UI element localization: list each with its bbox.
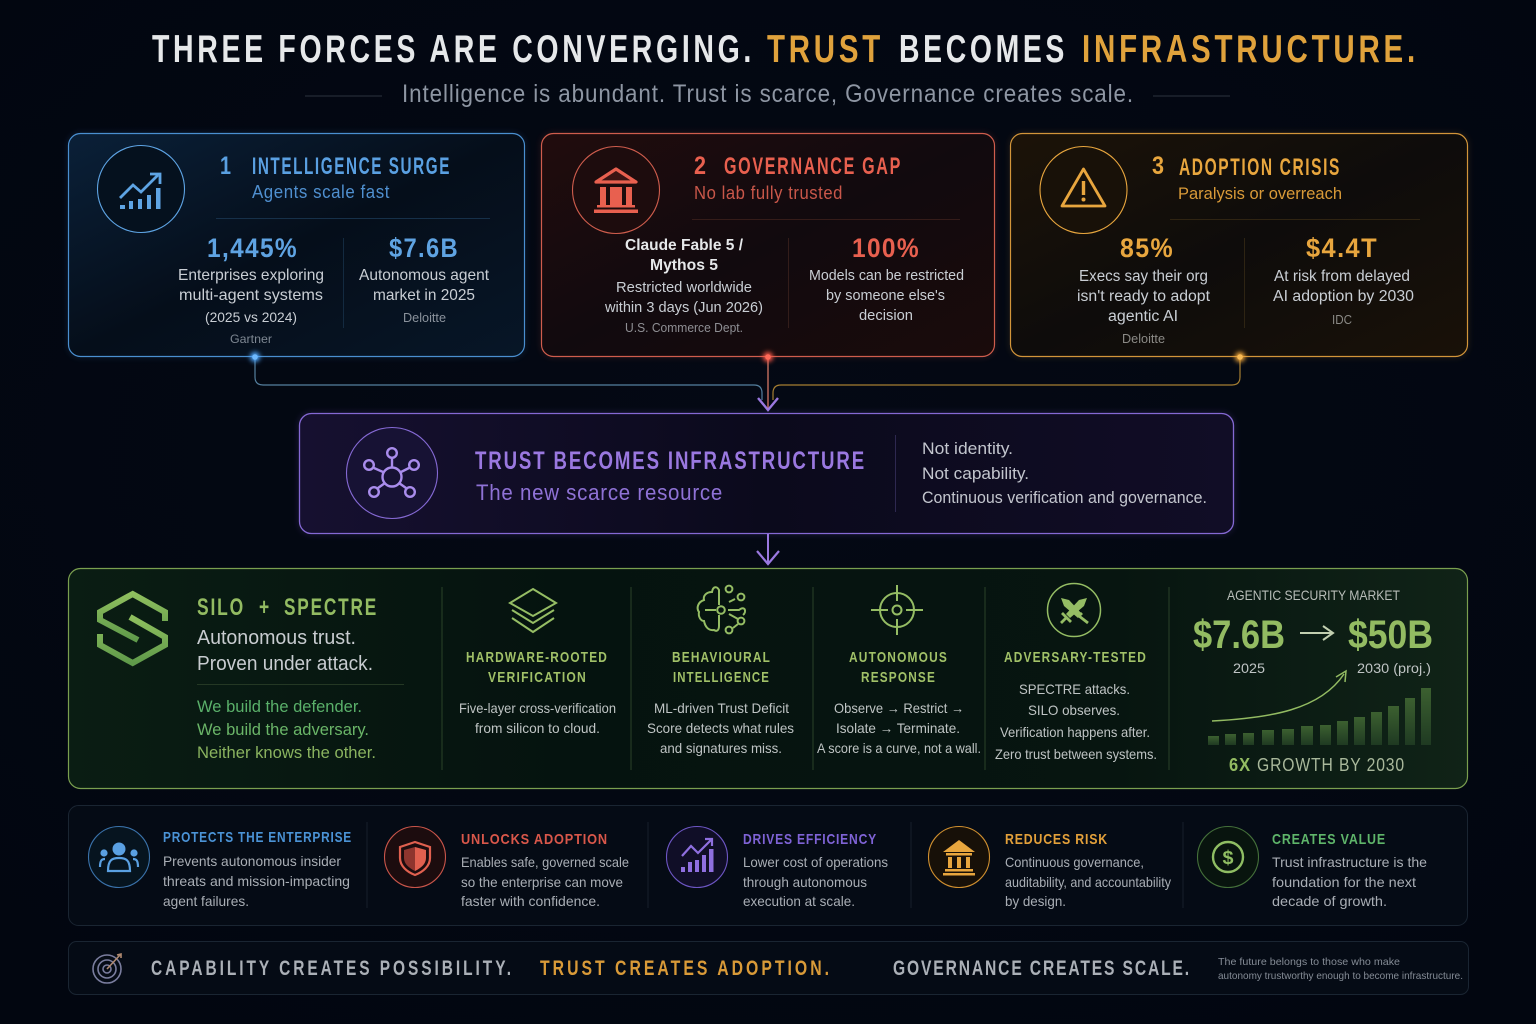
panel: intelligence surge xyxy=(68,134,524,356)
outcome: unlocks adoption: Enables safe, governed scale xyxy=(461,854,629,870)
statement xyxy=(922,440,1207,507)
outcome: protects the enterprise: agent failures. xyxy=(163,893,249,909)
outcome: drives efficiency xyxy=(666,826,888,909)
stat: 85% xyxy=(1077,233,1211,346)
outcome: unlocks adoption: UNLOCKS ADOPTION xyxy=(461,831,608,848)
stat: 100% xyxy=(809,233,964,324)
arrow into silo panel xyxy=(757,534,779,564)
stat: 85%: Execs say their org xyxy=(1079,268,1208,285)
chart: agentic security market: 2025 xyxy=(1233,660,1265,676)
panel: adoption crisis xyxy=(1010,134,1468,356)
outcome: protects the enterprise: Prevents autonomous insider xyxy=(163,853,341,869)
stat: 1,445%: Enterprises exploring xyxy=(178,267,324,284)
subtitle: Intelligence is abundant. Trust is scarce, Governance creates scale. xyxy=(402,80,1134,108)
outcome: reduces risk xyxy=(928,826,1171,909)
feature: adversary-tested: ADVERSARY-TESTED xyxy=(1004,649,1147,666)
subheading: Paralysis or overreach xyxy=(1178,184,1342,203)
panel: outcomes xyxy=(68,806,1468,926)
outcome: drives efficiency: execution at scale. xyxy=(743,893,855,909)
stat: Claude Fable 5 / Mythos 5: Mythos 5 xyxy=(650,257,718,274)
stat: 100%: decision xyxy=(859,307,913,324)
icon: network xyxy=(346,428,438,518)
stat: Claude Fable 5 / Mythos 5: U.S. Commerce Dept. xyxy=(625,321,743,335)
subheading: The new scarce resource xyxy=(476,480,723,505)
stat: 100%: Models can be restricted xyxy=(809,267,964,284)
icon: institution xyxy=(928,826,990,888)
title: TRUST xyxy=(767,28,884,71)
closing: governance: GOVERNANCE CREATES SCALE. xyxy=(893,957,1191,980)
icon: rising chart xyxy=(98,146,184,232)
feature: autonomous response: RESPONSE xyxy=(861,669,936,686)
icon: people xyxy=(88,826,150,888)
panel: silo + spectre xyxy=(68,568,1468,788)
outcome: reduces risk: REDUCES RISK xyxy=(1005,831,1108,848)
outcome: creates value: CREATES VALUE xyxy=(1272,831,1386,848)
brand statement: Neither knows the other. xyxy=(197,743,376,762)
feature: adversary-tested: SILO observes. xyxy=(1028,702,1120,718)
statement: Not identity. xyxy=(922,440,1013,458)
feature: behavioural intelligence: and signatures miss. xyxy=(660,740,782,756)
heading xyxy=(1152,152,1341,181)
stat: 1,445% xyxy=(178,233,324,346)
outcome: reduces risk: by design. xyxy=(1005,893,1066,909)
heading xyxy=(694,152,902,180)
brand statement: We build the adversary. xyxy=(197,720,369,739)
outcome: drives efficiency: DRIVES EFFICIENCY xyxy=(743,831,877,848)
stat: $4.4T: AI adoption by 2030 xyxy=(1273,288,1414,305)
feature: adversary-tested: Verification happens after. xyxy=(1000,724,1150,740)
bars xyxy=(1208,688,1431,745)
feature: autonomous response: Isolate → Terminate. xyxy=(836,720,960,736)
brand tagline: Proven under attack. xyxy=(197,653,373,675)
outcome: unlocks adoption xyxy=(384,826,629,909)
feature: behavioural intelligence: ML-driven Trust Deficit xyxy=(654,700,789,716)
closing note: autonomy trustworthy enough to become infrastructure. xyxy=(1218,970,1463,982)
subheading: Agents scale fast xyxy=(252,182,390,202)
statement: Not capability. xyxy=(922,465,1029,483)
market values: $50B xyxy=(1348,613,1433,657)
outcome: protects the enterprise: threats and mission-impacting xyxy=(163,873,350,889)
statement: Continuous verification and governance. xyxy=(922,489,1207,507)
growth label: GROWTH BY 2030 xyxy=(1257,755,1405,775)
arrow into trust panel xyxy=(758,398,778,410)
heading: 1 xyxy=(220,152,231,180)
outcome: creates value: Trust infrastructure is the xyxy=(1272,854,1427,870)
stat: 85%: Deloitte xyxy=(1122,332,1165,346)
heading: INTELLIGENCE SURGE xyxy=(252,153,451,180)
title: THREE FORCES ARE CONVERGING. xyxy=(152,28,755,71)
outcome: unlocks adoption: faster with confidence. xyxy=(461,893,600,909)
outcome: reduces risk: Continuous governance, xyxy=(1005,854,1144,870)
brand tagline: Autonomous trust. xyxy=(197,627,356,649)
brand heading: SPECTRE xyxy=(284,594,378,621)
stat: 100%: by someone else's xyxy=(826,287,945,304)
heading: 3 xyxy=(1152,152,1164,180)
stat: 100%: 100% xyxy=(852,233,920,263)
market values: $7.6B xyxy=(1193,613,1285,657)
stat: $7.6B: $7.6B xyxy=(389,233,459,263)
outcome: unlocks adoption: so the enterprise can move xyxy=(461,874,623,890)
outcome: reduces risk: auditability, and accountability xyxy=(1005,874,1171,890)
brand statement xyxy=(197,697,376,762)
stat: $7.6B: Deloitte xyxy=(403,310,446,325)
chart: agentic security market xyxy=(1193,587,1433,775)
market values xyxy=(1193,613,1433,657)
connector: force 3 to trust xyxy=(773,352,1245,400)
feature: behavioural intelligence: Score detects what rules xyxy=(647,720,794,736)
icon: efficiency chart xyxy=(666,826,728,888)
title: BECOMES xyxy=(899,28,1068,71)
growth curve xyxy=(1212,671,1346,721)
stat: Claude Fable 5 / Mythos 5: Claude Fable 5 / xyxy=(625,237,744,254)
feature: adversary-tested: SPECTRE attacks. xyxy=(1019,681,1130,697)
closing: trust: TRUST CREATES ADOPTION. xyxy=(540,957,832,980)
outcome: protects the enterprise: PROTECTS THE ENTERPRISE xyxy=(163,829,352,846)
icon: crosshair xyxy=(871,585,923,635)
icon: brain circuit xyxy=(698,586,745,633)
feature: autonomous response: AUTONOMOUS xyxy=(849,649,948,666)
heading xyxy=(220,152,451,180)
feature: autonomous response: Observe → Restrict → xyxy=(834,700,964,716)
feature: hardware-rooted verification: from silicon to cloud. xyxy=(475,720,600,736)
stat: 1,445%: Gartner xyxy=(230,332,272,346)
feature: autonomous response: A score is a curve, not a wall. xyxy=(817,740,981,756)
feature: hardware-rooted verification xyxy=(459,589,616,736)
icon: layers xyxy=(510,589,556,632)
feature: behavioural intelligence: INTELLIGENCE xyxy=(673,669,770,686)
title xyxy=(152,28,1419,71)
outcome: creates value: decade of growth. xyxy=(1272,893,1387,909)
chart: agentic security market: 2030 (proj.) xyxy=(1357,660,1431,676)
connector: force 1 to trust xyxy=(250,352,762,400)
panel: governance gap xyxy=(542,134,994,356)
stat: 1,445%: 1,445% xyxy=(207,233,298,263)
connector: force 2 to trust xyxy=(763,352,773,408)
stat: 85%: agentic AI xyxy=(1108,308,1178,325)
feature: behavioural intelligence: BEHAVIOURAL xyxy=(672,649,771,666)
stat: $4.4T: IDC xyxy=(1332,313,1352,327)
subheading: No lab fully trusted xyxy=(694,183,843,203)
stat: 85%: isn't ready to adopt xyxy=(1077,288,1211,305)
stat: $4.4T: At risk from delayed xyxy=(1274,268,1410,285)
title: INFRASTRUCTURE. xyxy=(1082,28,1419,71)
icon: dollar: $ xyxy=(1222,848,1234,869)
logo: silo spectre hexagon xyxy=(100,594,165,663)
stat: $7.6B: market in 2025 xyxy=(373,287,475,304)
stat: $4.4T xyxy=(1273,233,1414,327)
closing: capability: CAPABILITY CREATES POSSIBILITY. xyxy=(151,957,514,980)
panel: trust becomes infrastructure xyxy=(300,414,1234,534)
outcome: drives efficiency: Lower cost of operations xyxy=(743,854,888,870)
stat: Claude Fable 5 / Mythos 5: Restricted worldwide xyxy=(616,279,752,296)
panel: closing statement xyxy=(68,942,1468,994)
stat: $7.6B: Autonomous agent xyxy=(359,267,490,284)
feature: hardware-rooted verification: Five-layer cross-verification xyxy=(459,700,616,716)
brand heading: + xyxy=(259,594,271,621)
closing note xyxy=(1218,956,1463,982)
stat: 1,445%: (2025 vs 2024) xyxy=(205,309,297,325)
chart: agentic security market: AGENTIC SECURITY MARKET xyxy=(1227,587,1400,603)
outcome: creates value xyxy=(1198,826,1427,909)
icon: warning xyxy=(1040,146,1127,234)
stat: 1,445%: multi-agent systems xyxy=(179,287,323,304)
icon: institution xyxy=(572,146,660,234)
icon: target xyxy=(93,954,121,983)
heading: TRUST BECOMES INFRASTRUCTURE xyxy=(475,447,866,475)
brand heading: SILO xyxy=(197,594,245,621)
feature: hardware-rooted verification: HARDWARE-ROOTED xyxy=(466,649,608,666)
brand tagline xyxy=(197,627,373,675)
outcome: drives efficiency: through autonomous xyxy=(743,874,867,890)
outcome: protects the enterprise xyxy=(88,826,352,909)
feature: behavioural intelligence xyxy=(647,586,794,756)
outcome: creates value: foundation for the next xyxy=(1272,874,1416,890)
stat: $4.4T: $4.4T xyxy=(1306,233,1378,263)
feature: autonomous response xyxy=(817,585,981,756)
icon: crossed swords xyxy=(1048,584,1100,636)
heading: ADOPTION CRISIS xyxy=(1179,154,1341,181)
feature: adversary-tested xyxy=(995,584,1157,762)
stat: Claude Fable 5 / Mythos 5 xyxy=(604,237,763,335)
feature: adversary-tested: Zero trust between systems. xyxy=(995,746,1157,762)
brand heading xyxy=(197,594,378,621)
heading: GOVERNANCE GAP xyxy=(724,153,902,180)
stat: Claude Fable 5 / Mythos 5: within 3 days (Jun 2026) xyxy=(604,299,763,316)
growth label: 6X xyxy=(1229,755,1251,775)
closing note: The future belongs to those who make xyxy=(1218,956,1400,968)
icon: shield xyxy=(384,826,446,888)
stat: 85%: 85% xyxy=(1120,233,1174,263)
icon: dollar xyxy=(1198,826,1258,888)
stat: $7.6B xyxy=(359,233,490,325)
brand statement: We build the defender. xyxy=(197,697,362,716)
heading: 2 xyxy=(694,152,706,180)
feature: hardware-rooted verification: VERIFICATION xyxy=(488,669,587,686)
